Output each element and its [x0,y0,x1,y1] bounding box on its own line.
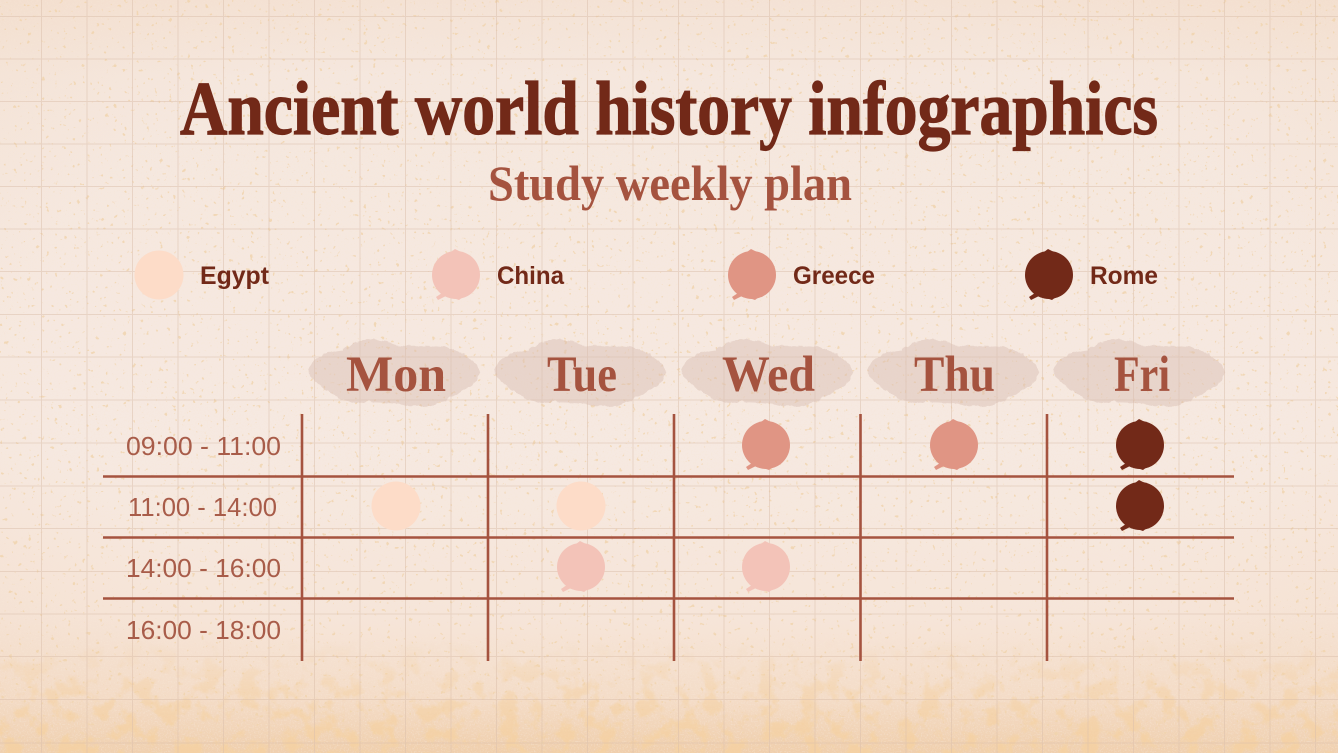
legend item: Egypt [134,250,270,300]
time labels [126,431,281,645]
day header: Mon [309,340,479,407]
markers: 14:00 - 16:00 row [557,541,790,592]
weekly schedule table [103,340,1234,661]
day header: Tue: Tue [547,347,617,403]
legend item: Rome: Rome [1090,262,1158,290]
time labels: 11:00 - 14:00 [128,492,277,522]
time labels: 14:00 - 16:00 [126,553,281,583]
day header: Thu [868,340,1038,407]
legend item: China: China [497,262,565,290]
day header: Wed [682,340,852,407]
legend item: Egypt: Egypt [200,262,270,290]
day header: Wed: Wed [722,347,815,403]
day header: Mon: Mon [346,347,446,403]
time labels: 09:00 - 11:00 [126,431,281,461]
day header: Fri: Fri [1114,347,1170,403]
day header: Tue [495,340,665,407]
markers: 09:00 - 11:00 row [742,419,1164,470]
legend item: Greece: Greece [793,262,875,290]
table grid lines [103,414,1234,661]
legend [134,249,1158,300]
legend item: Greece [728,249,875,300]
day header: Fri [1054,340,1224,407]
time labels: 16:00 - 18:00 [126,615,281,645]
subtitle: Study weekly plan [488,155,852,211]
legend item: China [432,249,565,300]
day header: Thu: Thu [914,347,995,403]
legend item: Rome [1025,249,1158,300]
title: Ancient world history infographics [180,67,1158,151]
markers: 11:00 - 14:00 row [372,480,1164,531]
